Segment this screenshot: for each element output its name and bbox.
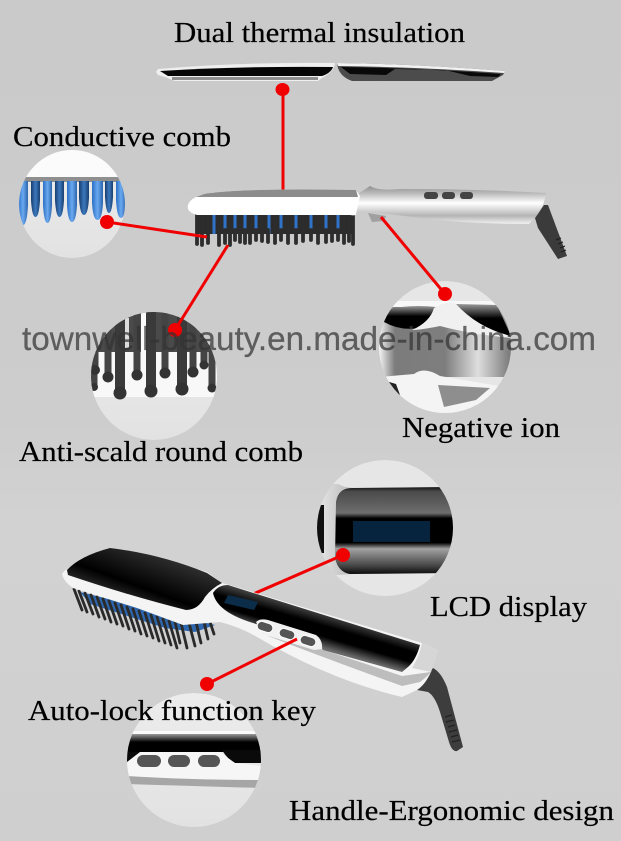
bristles [196,214,354,234]
white body [62,548,438,697]
head [188,190,360,215]
callout line: auto-lock key [200,639,297,691]
bristles [80,592,215,632]
button panel [256,619,322,650]
head black face [67,548,222,610]
end cap shading [412,643,438,672]
panel: LCD detail circle [317,460,453,596]
buttons [424,192,473,199]
handle black face [213,585,420,672]
panel: auto-lock detail circle [127,693,262,827]
callout line: thermal insulation [276,83,290,190]
callout line: conductive comb [100,215,207,237]
lower silver shading [268,632,431,686]
callout line: round comb [168,245,228,337]
ion tab [368,213,386,222]
callout line: negative ion [381,217,452,301]
cord [417,668,463,751]
cord [535,205,567,259]
label: LCD display: LCD display [430,592,587,623]
panel: negative ion detail circle [379,281,511,413]
brush side view [188,186,567,259]
heading: Dual thermal insulation: Dual thermal insulation [174,18,465,49]
label: Negative ion: Negative ion [402,413,560,444]
handle [355,186,546,224]
label: Handle-Ergonomic design: Handle-Ergonomic design [289,796,614,827]
watermark: townwell-beauty.en.made-in-china.com [22,320,596,357]
label: Auto-lock function key: Auto-lock function key [28,696,316,727]
icon: thermal insulation plates [156,63,505,81]
label: Conductive comb: Conductive comb [13,122,231,153]
panel: conductive comb detail circle [18,150,126,258]
screen [224,595,258,610]
label: Anti-scald round comb: Anti-scald round comb [19,437,303,468]
brush front view [62,548,463,751]
callout line: LCD display [251,548,350,595]
panel: round comb detail circle [90,312,220,440]
